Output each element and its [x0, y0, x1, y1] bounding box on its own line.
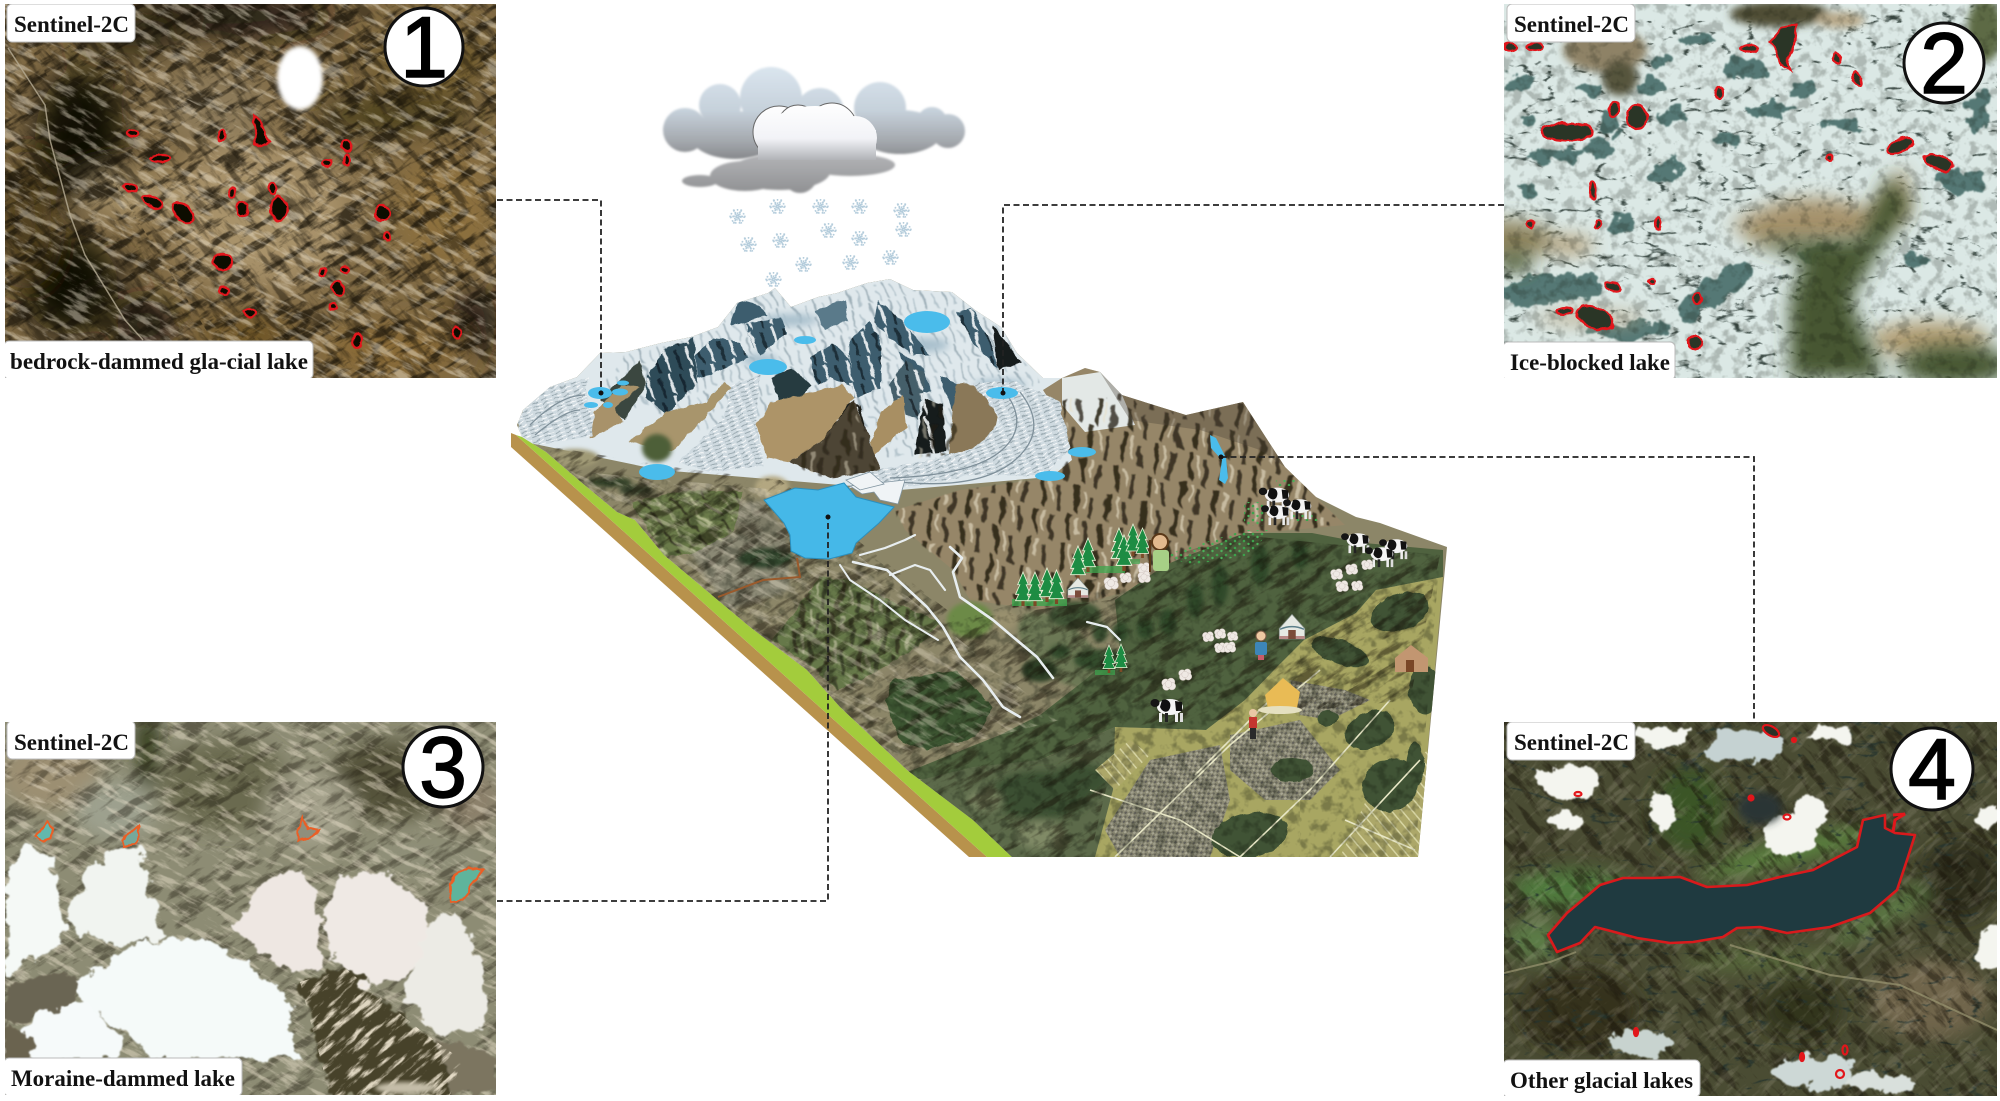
lake outlines 1: [122, 115, 460, 348]
cloud: [663, 67, 965, 193]
panel 2: ice-blocked lake: [1504, 4, 1997, 378]
teal melt patches: [1499, 34, 1992, 338]
glaciers: [517, 375, 1070, 488]
satellite basemap 3: [0, 722, 500, 1095]
label: sensor: [7, 721, 135, 759]
slate rock faces: [600, 300, 1021, 455]
main lake: [764, 483, 894, 559]
number badge 3: [402, 726, 484, 808]
glacier snout teeth: [846, 472, 905, 504]
trees: [1016, 524, 1149, 673]
satellite basemap 4: [1504, 722, 2000, 1096]
snowflakes: [729, 199, 912, 287]
cloud front puff: [753, 103, 877, 160]
lake outlines 3: [36, 818, 483, 902]
large lake outline: [1548, 815, 1915, 952]
terrain texture: [540, 445, 1440, 857]
left green hills: [631, 490, 940, 690]
back cloud: [663, 67, 965, 159]
pasture patches: [1012, 480, 1318, 675]
green valley band: [900, 533, 1443, 785]
snowfields: [5, 845, 486, 1060]
satellite basemap 1: [0, 0, 497, 378]
sheep: [1104, 560, 1373, 690]
fields base: [1095, 577, 1443, 857]
forest slope at ridge foot: [1050, 541, 1308, 671]
lakes on ice: [584, 311, 1228, 484]
dashed leader 3: [497, 514, 830, 901]
number badge 2: [1902, 22, 1986, 104]
terrain block: [500, 270, 1460, 870]
label: sensor: Sentinel-2C: [14, 12, 129, 37]
rock ridges: [5, 968, 496, 1095]
terrain surface: [500, 270, 1460, 870]
panel 3: moraine-dammed lake: [0, 720, 500, 1096]
number badge 3: 3: [419, 720, 467, 816]
mountain snow base: [515, 279, 1130, 490]
satellite basemap 2: [1504, 4, 1997, 378]
number badge 4: [1891, 722, 1973, 818]
lower-left forest: [920, 727, 1145, 857]
label: lake type: [1503, 342, 1675, 380]
label: sensor: [1507, 4, 1635, 42]
label: sensor: [7, 4, 135, 42]
label: lake type: Other glacial lakes: [1510, 1068, 1693, 1093]
cloud lower band: [682, 154, 895, 193]
label: sensor: Sentinel-2C: [1514, 730, 1629, 755]
dark hills: [885, 670, 993, 750]
panel 1: bedrock-dammed glacial lake: [0, 0, 497, 379]
number badge 2: 2: [1920, 16, 1968, 112]
dark orchards: [1209, 585, 1441, 863]
label: sensor: Sentinel-2C: [1514, 12, 1629, 37]
label: lake type: Moraine-dammed lake: [11, 1066, 235, 1091]
label: lake type: [1503, 1060, 1700, 1097]
dashed leader 4: [1218, 454, 1754, 722]
number badge 1: [384, 6, 464, 88]
field tracks: [1090, 670, 1420, 857]
meltwater rivers: [840, 535, 1120, 717]
number badge 1: 1: [400, 0, 448, 96]
label: sensor: [1507, 722, 1635, 760]
number badge 4: 4: [1908, 722, 1956, 818]
valley flats and hills: [880, 598, 1115, 730]
label: lake type: bedrock-dammed gla-cial lake: [10, 349, 308, 374]
brown slopes: [589, 382, 997, 478]
panel 4: other glacial lakes: [1503, 722, 2000, 1097]
dashed leader 1: [497, 200, 604, 396]
label: lake type: Ice-blocked lake: [1510, 350, 1670, 375]
tan and green ridges: [1455, 165, 1990, 358]
dashed leader 2: [1000, 205, 1504, 396]
cows: [1150, 488, 1407, 722]
label: lake type: [4, 1058, 242, 1096]
block side: soil: [511, 433, 987, 857]
lake outlines 2: [1504, 25, 1954, 349]
yurts and houses: [1068, 578, 1428, 714]
shepherd, herder, walker: [1150, 534, 1267, 739]
lower right range: [896, 368, 1345, 610]
left valley terrain: [551, 434, 793, 610]
label: lake type: [4, 341, 313, 379]
block side: grass: [516, 435, 1012, 857]
small lake outlines 4: [1574, 723, 1905, 1078]
snow patch: [277, 46, 323, 110]
label: sensor: Sentinel-2C: [14, 730, 129, 755]
snow patches: [1538, 726, 2000, 1090]
